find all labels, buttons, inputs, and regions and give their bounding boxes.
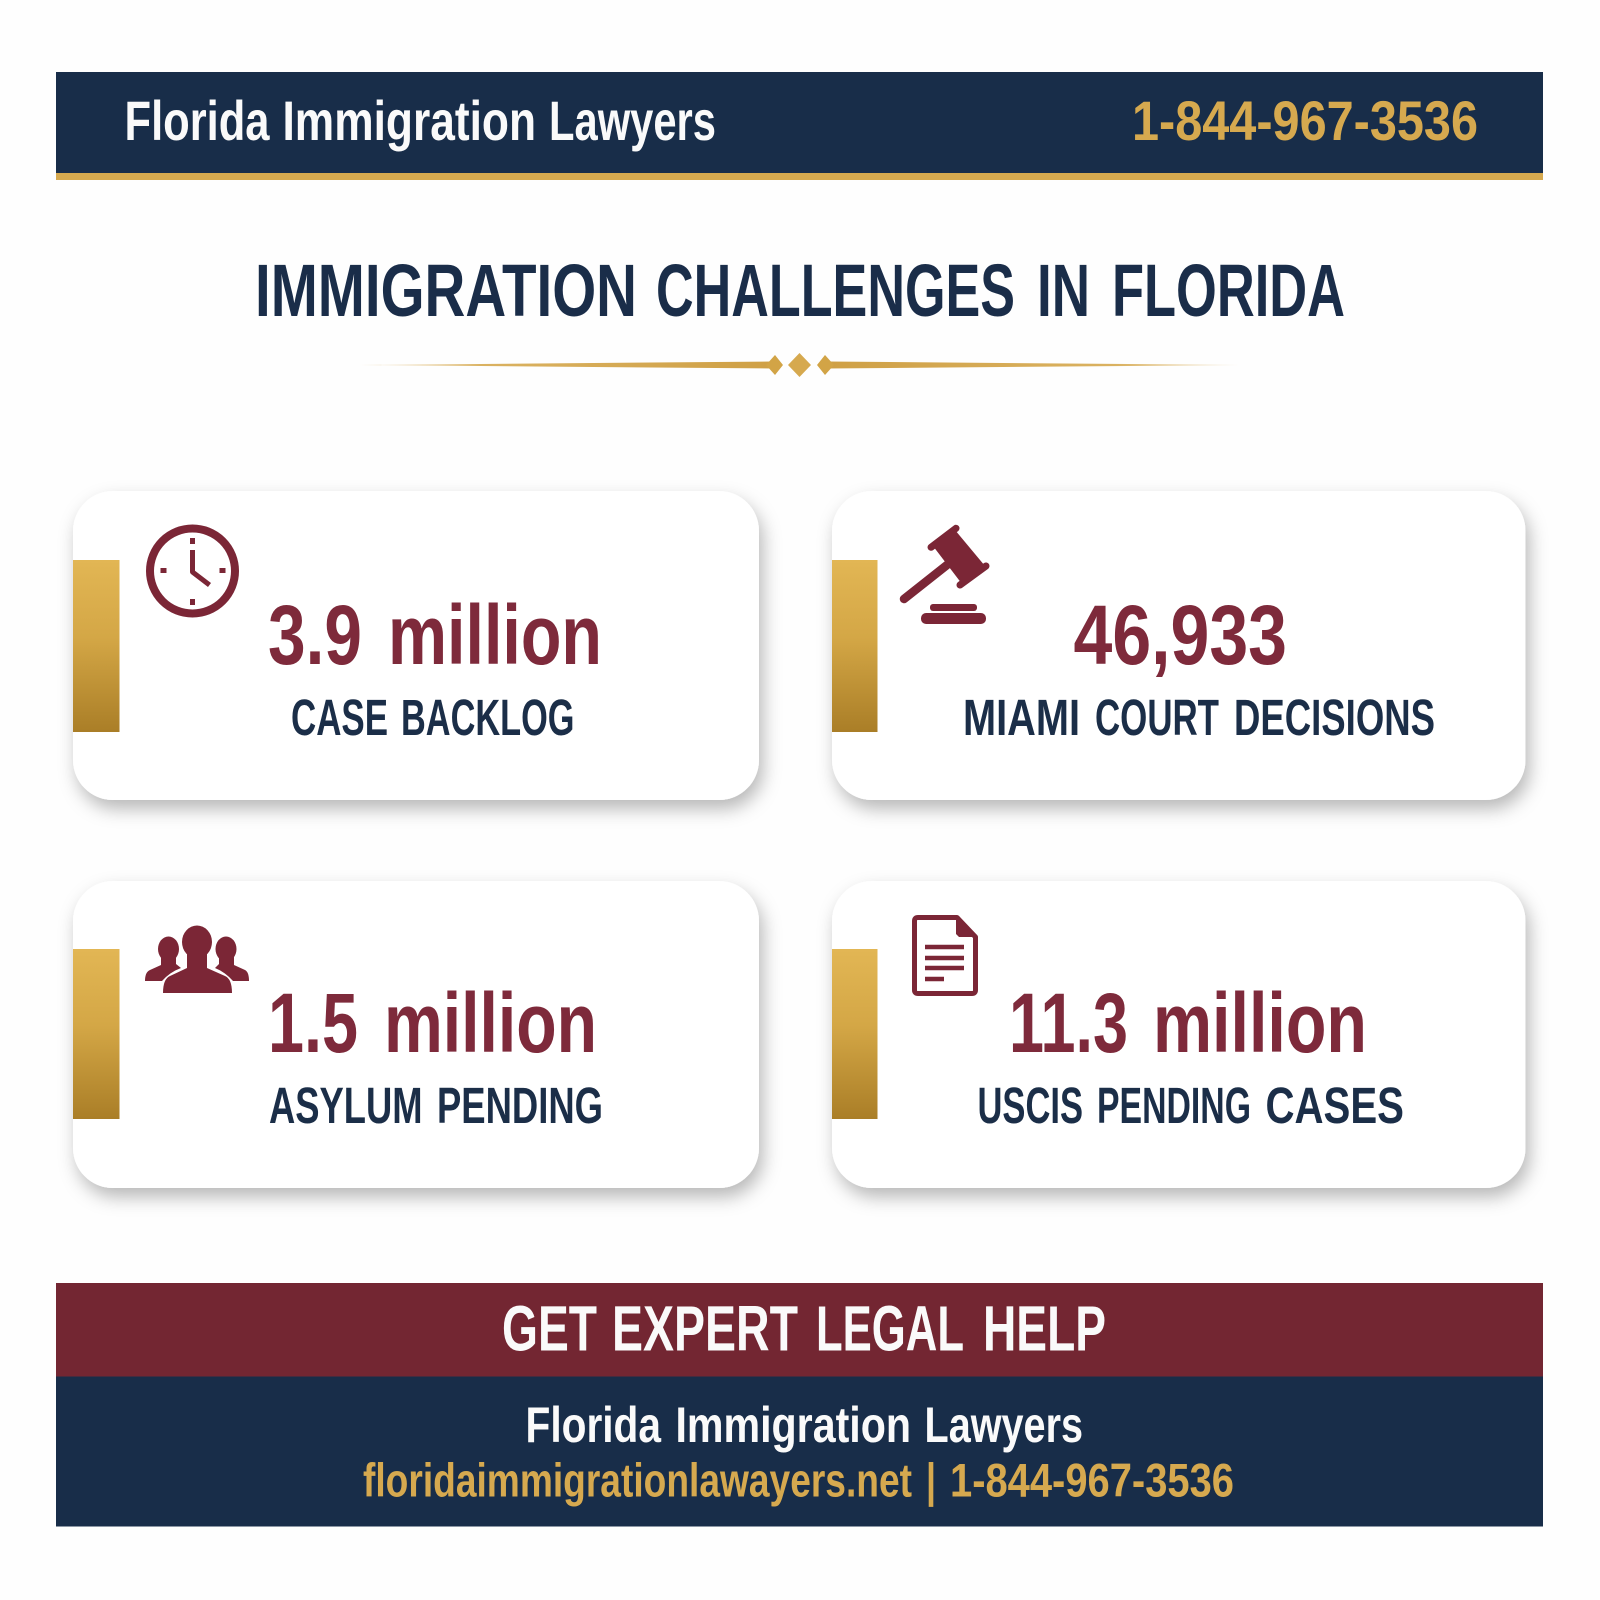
- title: FLORIDA: [1112, 249, 1345, 332]
- title divider with diamonds: [359, 353, 1240, 377]
- panel: asylum pending: [73, 881, 759, 1188]
- firm name: Immigration: [282, 89, 536, 152]
- title: IMMIGRATION: [255, 249, 637, 332]
- stat value: [268, 588, 602, 682]
- footer website and phone: floridaimmigrationlawayers.net: [363, 1454, 912, 1506]
- stat value: 11.3: [1009, 976, 1128, 1070]
- stat value: [268, 976, 597, 1070]
- icon: clock: [150, 528, 235, 614]
- call to action heading: [502, 1292, 1106, 1364]
- stat label: BACKLOG: [401, 689, 574, 746]
- title: [255, 249, 1345, 332]
- footer call to action: [56, 1283, 1543, 1526]
- footer website and phone: 1-844-967-3536: [950, 1454, 1234, 1506]
- gold accent bar: [73, 949, 120, 1119]
- firm name: Florida: [124, 89, 270, 152]
- icon: people: [145, 926, 249, 993]
- stat value: million: [388, 588, 602, 682]
- stat label: DECISIONS: [1234, 689, 1435, 746]
- gold accent bar: [832, 560, 878, 732]
- stat label: [269, 1077, 603, 1134]
- stat value: 46,933: [1074, 588, 1287, 682]
- stat label: USCIS: [978, 1077, 1083, 1134]
- call to action heading: HELP: [983, 1292, 1106, 1364]
- stat label: [291, 689, 574, 746]
- stat value: million: [384, 976, 597, 1070]
- stat value: [1009, 976, 1367, 1070]
- stat label: CASE: [291, 689, 388, 746]
- call to action heading: GET: [502, 1292, 597, 1364]
- icon: document: [914, 916, 976, 994]
- footer website and phone: |: [926, 1454, 936, 1506]
- title: CHALLENGES: [656, 249, 1015, 332]
- gold accent bar: [832, 949, 878, 1119]
- gold accent bar: [73, 560, 120, 732]
- stat label: [978, 1077, 1404, 1134]
- footer firm name: Immigration: [676, 1397, 911, 1453]
- top header bar: [56, 72, 1543, 180]
- panel: case backlog: [73, 491, 759, 800]
- footer firm name: Lawyers: [924, 1397, 1083, 1453]
- stat label: PENDING: [437, 1077, 603, 1134]
- firm name: [124, 89, 716, 152]
- footer firm name: [526, 1397, 1083, 1453]
- stat label: ASYLUM: [269, 1077, 422, 1134]
- stat label: [963, 689, 1435, 746]
- phone number: 1-844-967-3536: [1132, 89, 1478, 152]
- stat label: PENDING: [1097, 1077, 1251, 1134]
- stat label: CASES: [1266, 1077, 1404, 1134]
- panel: USCIS pending cases: [832, 881, 1526, 1188]
- footer firm name: Florida: [526, 1397, 662, 1453]
- call to action heading: EXPERT: [612, 1292, 798, 1364]
- stat label: COURT: [1095, 689, 1219, 746]
- stat value: million: [1153, 976, 1367, 1070]
- stat value: 3.9: [268, 588, 362, 682]
- call to action heading: LEGAL: [816, 1292, 964, 1364]
- panel: Miami court decisions: [832, 491, 1526, 800]
- icon: gavel: [904, 528, 986, 624]
- title: IN: [1037, 249, 1090, 332]
- stat value: 1.5: [268, 976, 358, 1070]
- stat label: MIAMI: [963, 689, 1080, 746]
- firm name: Lawyers: [549, 89, 716, 152]
